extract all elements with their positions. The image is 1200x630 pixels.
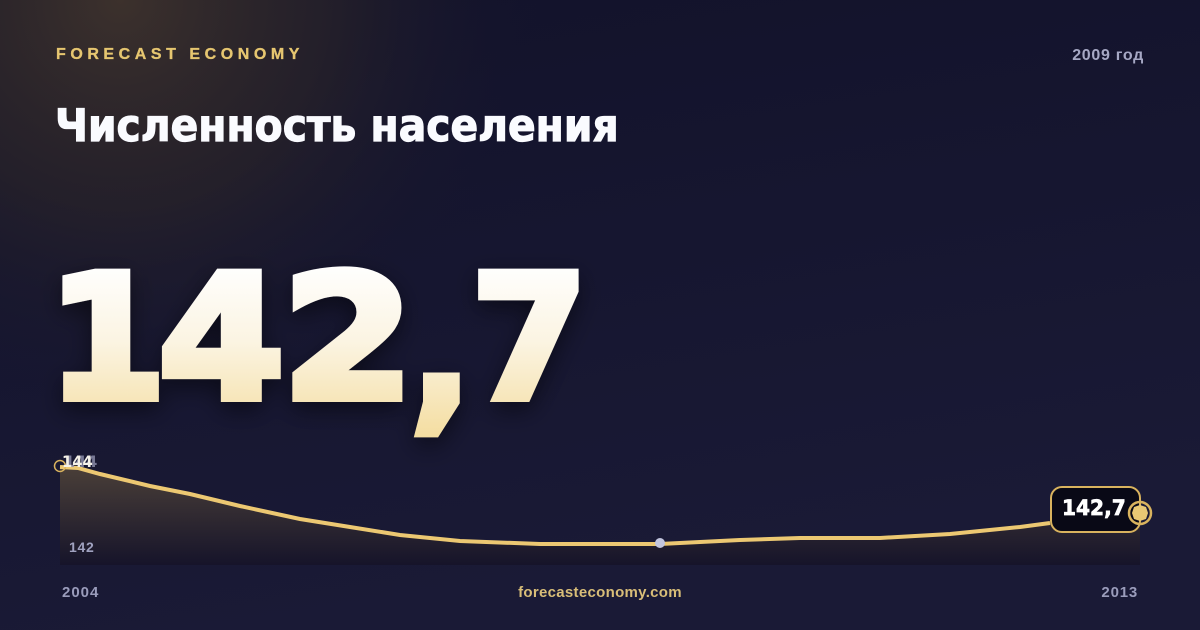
area chart [54, 452, 1151, 565]
max label: 144 [62, 452, 93, 471]
end year: 2013 [1101, 584, 1138, 601]
title: Численность населения [55, 100, 619, 152]
big number: 1 [47, 238, 167, 439]
big number: 7 [471, 239, 588, 439]
source url: forecasteconomy.com [518, 584, 682, 601]
start year: 2004 [62, 584, 99, 601]
big number: , [410, 250, 473, 450]
big number: 2 [282, 238, 415, 439]
min label: 142 [69, 539, 94, 555]
big number: 4 [158, 238, 285, 439]
chart area fill [60, 467, 1140, 565]
end value callout: 142,7 [1062, 496, 1126, 520]
max label ghost: 144 [64, 452, 97, 471]
year label: 2009 год [1072, 47, 1144, 64]
mid point marker [655, 538, 665, 548]
end value callout [1051, 487, 1140, 532]
brand label: FORECAST ECONOMY [56, 46, 304, 63]
chart line [60, 467, 1050, 544]
end marker [1129, 502, 1151, 524]
start marker [54, 460, 66, 472]
big number [47, 238, 588, 450]
